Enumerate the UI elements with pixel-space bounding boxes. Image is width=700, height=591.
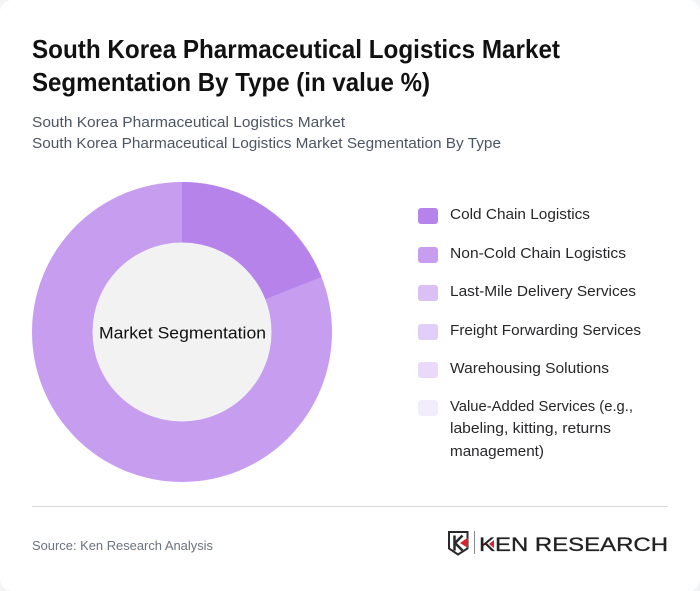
legend item: warehousing solutions: Warehousing Solutions: [450, 360, 609, 377]
legend item: value-added services: labeling, kitting, returns: [450, 420, 611, 437]
title: [32, 34, 560, 97]
legend item: value-added services: [418, 398, 633, 460]
source note: Source: Ken Research Analysis: [32, 538, 213, 553]
subtitle: South Korea Pharmaceutical Logistics Market Segmentation By Type: [32, 135, 501, 152]
centre label: Market Segmentation: [99, 324, 266, 342]
title: Segmentation By Type (in value %): [32, 67, 430, 97]
legend item: cold chain logistics: Cold Chain Logistics: [450, 206, 590, 223]
donut chart: [32, 182, 332, 482]
logo: Ken Research: [449, 531, 668, 556]
legend item: non-cold chain logistics: Non-Cold Chain Logistics: [450, 245, 626, 262]
logo wordmark: KEN RESEARCH: [479, 534, 668, 556]
segment: non-cold chain logistics: [32, 182, 332, 482]
legend item: last-mile delivery services: Last-Mile Delivery Services: [450, 283, 636, 300]
legend item: value-added services: management): [450, 443, 544, 460]
legend: [418, 206, 641, 460]
title: South Korea Pharmaceutical Logistics Market: [32, 34, 560, 64]
subtitle: [32, 114, 501, 152]
segment: cold chain logistics: [182, 182, 322, 332]
legend item: value-added services: Value-Added Services (e.g.,: [450, 398, 633, 415]
subtitle: South Korea Pharmaceutical Logistics Market: [32, 114, 346, 131]
legend item: freight forwarding services: Freight Forwarding Services: [450, 322, 641, 339]
logo shield icon: [449, 532, 468, 554]
logo wordmark red accent: [489, 540, 494, 548]
donut centre: [92, 242, 272, 422]
